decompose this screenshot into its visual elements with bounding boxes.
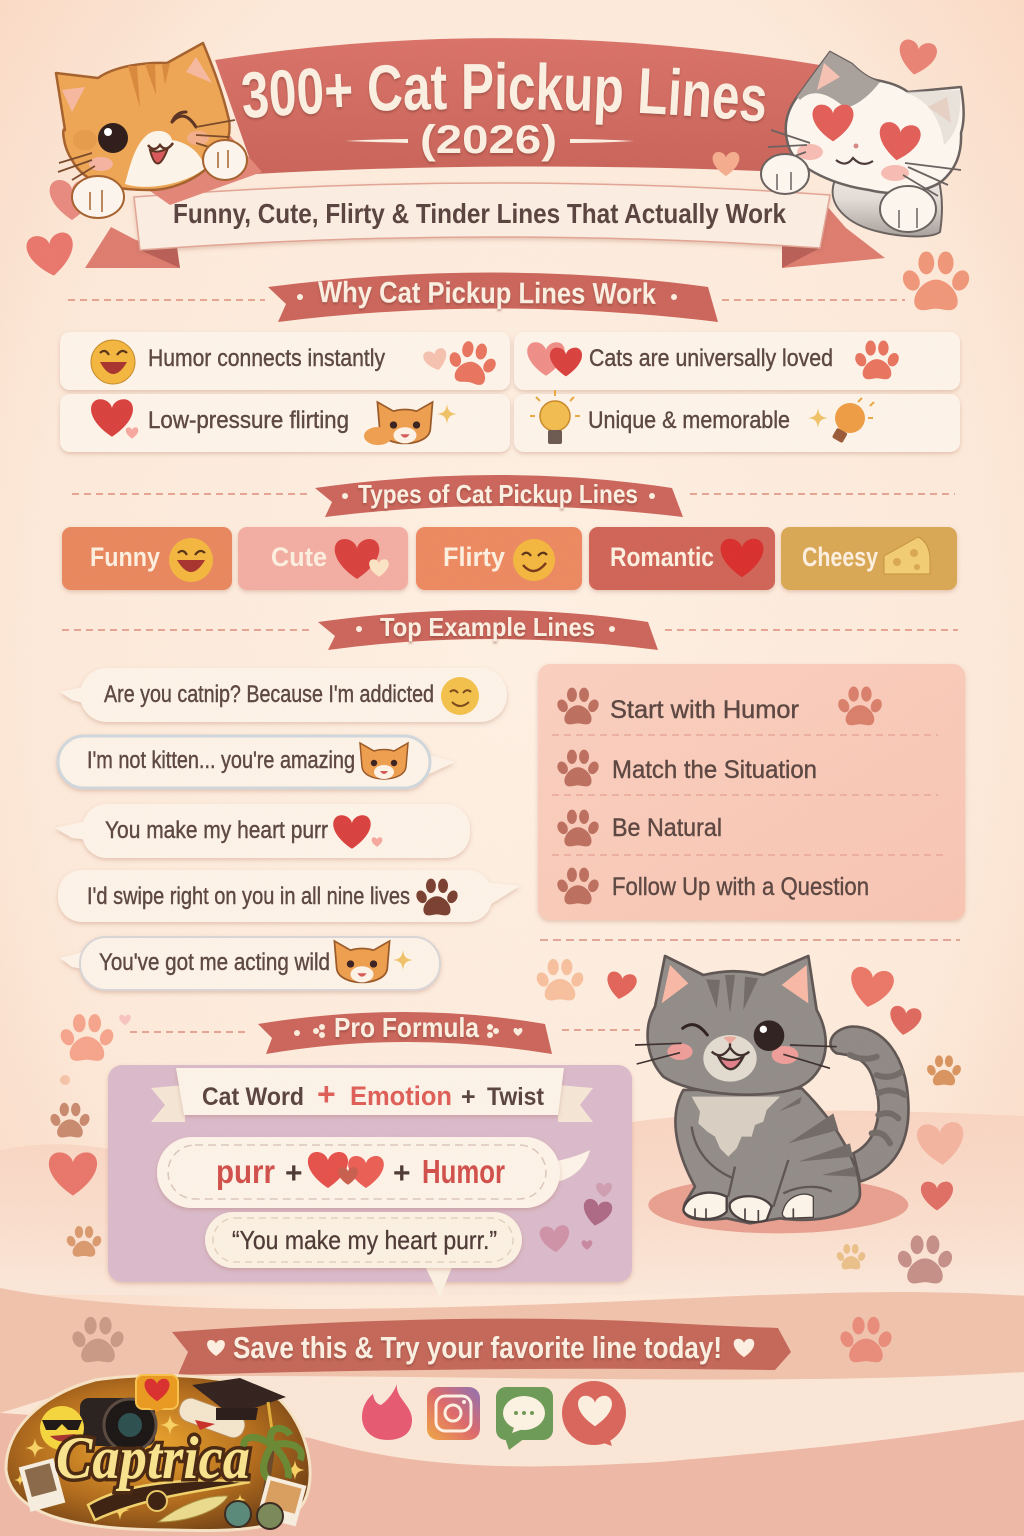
feet [683,1193,727,1219]
icon: message [496,1387,553,1450]
decorative hearts and paws around cat [49,959,966,1283]
bubble 4 [58,870,520,922]
tip 1: Start with Humor [610,696,799,724]
pill: flirty [416,527,582,590]
sunglasses emoji [40,1406,84,1450]
type pills [62,527,957,590]
sunglasses [225,1501,283,1529]
formula banner: Emotion [350,1081,452,1111]
heading text: Top Example Lines [380,612,595,642]
panel: tips [538,664,965,920]
card: humor [60,332,510,390]
section heading: formula [130,1012,640,1054]
tip 4 [555,868,869,904]
panel: why cards [60,332,960,452]
decorative hearts and paw top [25,38,972,310]
subtitle banner [85,183,885,268]
pill: cheesy: Cheesy [802,542,878,572]
small hearts in panel [539,1183,613,1253]
pill: cute [238,527,408,590]
heading text: Pro Formula [334,1012,479,1043]
eyes [683,1025,707,1035]
graduation cap [192,1378,286,1430]
pill: romantic: Romantic [610,542,714,572]
bubble 5: You've got me acting wild [99,949,330,976]
divider under tips [540,939,960,941]
pill: funny: Funny [90,542,160,572]
tip 3: Be Natural [612,814,722,842]
example speech bubbles [55,668,520,990]
pill: cute: Cute [271,542,327,572]
section heading: why [68,272,905,322]
bubble 5 [60,937,440,990]
paws [761,154,809,194]
bubble 3 [55,804,470,858]
formula banner: Twist [487,1083,545,1111]
card: unique: Unique & memorable [588,407,790,434]
aperture [147,1491,167,1511]
section heading: types [72,475,955,517]
formula banner: Cat Word [202,1083,304,1111]
card: loved [514,332,960,390]
card: low pressure: Low-pressure flirting [148,407,349,434]
formula banner: + [461,1083,476,1111]
card: low pressure [60,394,510,452]
logo wordmark: Captrica [56,1425,250,1491]
heart eyes [812,105,854,141]
bubble 2 [58,736,455,788]
brand logo [6,1375,310,1531]
year: (2026) [420,118,557,162]
diploma [176,1395,248,1441]
formula bubble: + [285,1157,303,1190]
card: humor: Humor connects instantly [148,345,385,372]
tip 2: Match the Situation [612,756,817,784]
tip 2 [555,750,817,786]
bubble 2: I'm not kitten... you're amazing [87,747,355,774]
camera [80,1398,156,1451]
bubble 3: You make my heart purr [105,817,328,844]
head [648,956,826,1095]
pill: flirty: Flirty [443,542,505,572]
icon: instagram [427,1387,480,1440]
subtitle text: Funny, Cute, Flirty & Tinder Lines That Actually Work [173,198,786,229]
bubble 4: I'd swipe right on you in all nine lives [87,883,410,910]
tip 3 [555,810,722,846]
swoosh [88,1480,250,1520]
heart badge [136,1375,178,1412]
example bubble: “You make my heart purr.” [232,1225,497,1255]
heading text: Why Cat Pickup Lines Work [318,276,656,311]
palm tree [244,1428,301,1495]
example bubble [205,1212,522,1297]
call to action ribbon [172,1319,791,1375]
card: unique [514,390,960,452]
pill: romantic [589,527,775,590]
call to action text: Save this & Try your favorite line today! [233,1330,722,1365]
feather [158,1496,228,1522]
heading text: Types of Cat Pickup Lines [358,479,638,509]
orange cat [50,43,262,220]
panel: formula [108,1065,632,1297]
section heading: examples [62,610,958,650]
title: 300+ Cat Pickup Lines [242,62,766,128]
tip 1 [555,687,884,725]
paws [203,140,247,180]
formula banner [151,1068,593,1122]
white and grey cat [761,52,964,236]
grey tabby cat [635,956,908,1233]
social icons [362,1381,626,1450]
card: loved: Cats are universally loved [589,345,833,372]
icon: heart bubble [562,1381,626,1446]
header title ribbon [215,38,819,176]
bottom paws [70,1317,894,1362]
icon: flame [362,1384,412,1440]
formula bubble: + [393,1157,411,1190]
bubble 1 [60,668,507,722]
formula bubble: purr [216,1153,275,1190]
tip 4: Follow Up with a Question [612,873,869,901]
pill: cheesy [781,527,957,590]
photos [19,1458,306,1526]
formula bubble [157,1137,590,1208]
formula banner: + [317,1076,336,1112]
eye [98,123,128,153]
bubble 1: Are you catnip? Because I'm addicted [104,681,434,708]
pill: funny [62,527,232,590]
formula bubble: Humor [422,1153,505,1190]
